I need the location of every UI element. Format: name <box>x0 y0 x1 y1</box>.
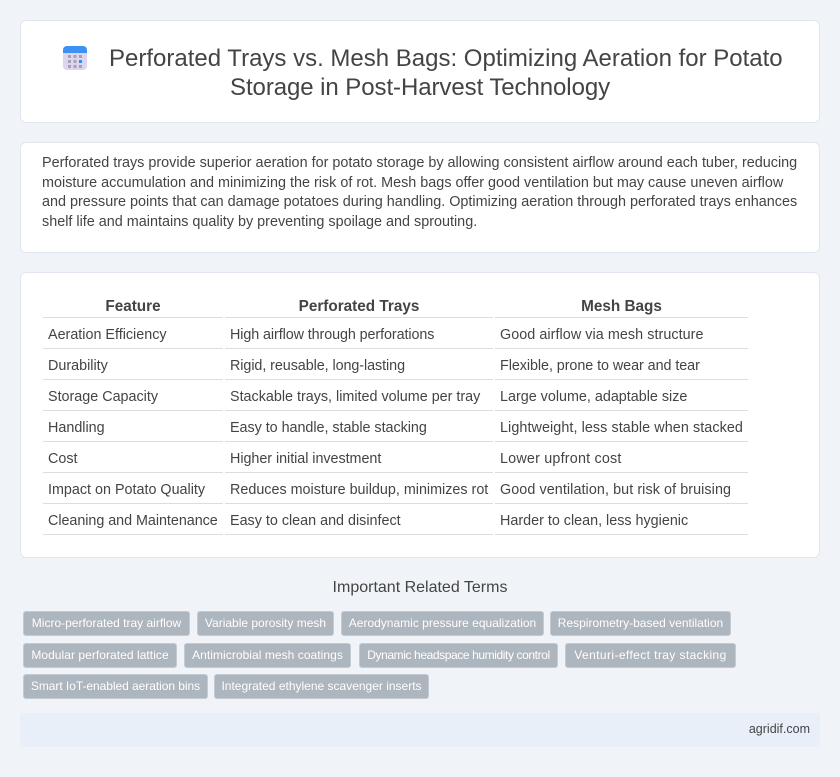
comparison table: Impact on Potato Quality <box>48 482 205 498</box>
related term tags: Smart IoT-enabled aeration bins <box>31 679 200 693</box>
comparison table: Mesh Bags <box>581 298 662 315</box>
comparison table: Aeration Efficiency <box>48 327 167 343</box>
related term tags: Integrated ethylene scavenger inserts <box>221 679 422 693</box>
intro text: Perforated trays provide superior aeration for potato storage by allowing consistent airflow around each tuber, reducing <box>42 155 797 171</box>
title: Storage in Post-Harvest Technology <box>230 74 610 101</box>
comparison table: Storage Capacity <box>48 389 158 405</box>
comparison table: Cost <box>48 451 78 467</box>
comparison table: Feature <box>105 298 161 315</box>
comparison table: Durability <box>48 358 108 374</box>
comparison table: Cleaning and Maintenance <box>48 513 218 529</box>
related terms heading: Important Related Terms <box>333 579 507 596</box>
intro text: shelf life and maintains quality by preventing spoilage and sprouting. <box>42 214 477 230</box>
comparison table: Good ventilation, but risk of bruising <box>500 482 731 498</box>
comparison table: Higher initial investment <box>230 451 381 467</box>
comparison table: Large volume, adaptable size <box>500 389 687 405</box>
comparison table: Harder to clean, less hygienic <box>500 513 688 529</box>
related term tags: Dynamic headspace humidity control <box>367 648 550 662</box>
comparison table: Reduces moisture buildup, minimizes rot <box>230 482 488 498</box>
header card <box>20 20 820 123</box>
related term tags: Respirometry-based ventilation <box>558 616 723 630</box>
related term tags: Venturi-effect tray stacking <box>574 648 727 662</box>
intro text: and pressure points that can damage potatoes during handling. Optimizing aeration through perforated trays enhances <box>42 194 797 210</box>
comparison table <box>43 298 748 535</box>
intro text: moisture accumulation and minimizing the risk of rot. Mesh bags offer good ventilation but may cause uneven airflow <box>42 174 783 190</box>
icon: calendar grid <box>63 46 87 70</box>
comparison table: Good airflow via mesh structure <box>500 327 704 343</box>
intro panel <box>20 142 820 253</box>
comparison table: Lower upfront cost <box>500 451 622 467</box>
comparison table: Stackable trays, limited volume per tray <box>230 389 480 405</box>
related term tags: Antimicrobial mesh coatings <box>192 648 343 662</box>
comparison table: Easy to clean and disinfect <box>230 513 401 529</box>
comparison table: High airflow through perforations <box>230 327 434 343</box>
related term tags <box>23 611 736 699</box>
comparison table: Rigid, reusable, long-lasting <box>230 358 405 374</box>
intro text <box>42 155 797 230</box>
title: Perforated Trays vs. Mesh Bags: Optimizing Aeration for Potato <box>109 45 783 72</box>
comparison table: Easy to handle, stable stacking <box>230 420 427 436</box>
title <box>109 45 783 101</box>
related term tags: Modular perforated lattice <box>31 648 169 662</box>
related term tags: Aerodynamic pressure equalization <box>349 616 536 630</box>
comparison table: Handling <box>48 420 105 436</box>
related term tags: Variable porosity mesh <box>205 616 326 630</box>
comparison table: Flexible, prone to wear and tear <box>500 358 700 374</box>
footer source: agridif.com <box>749 722 810 736</box>
comparison table: Lightweight, less stable when stacked <box>500 420 743 436</box>
comparison table panel <box>20 272 820 558</box>
comparison table: Perforated Trays <box>299 298 419 315</box>
related term tags: Micro-perforated tray airflow <box>32 616 181 630</box>
footer bar <box>20 713 820 747</box>
